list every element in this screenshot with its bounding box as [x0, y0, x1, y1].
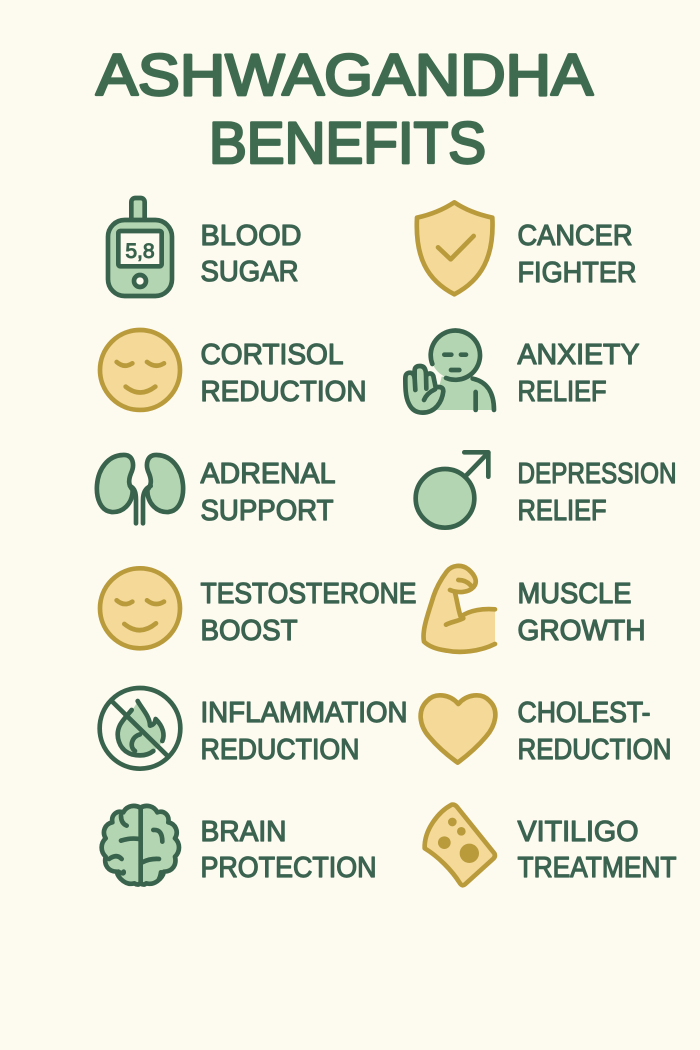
label: depression relief	[518, 458, 676, 527]
icon: glucose meter: 5,8	[125, 239, 155, 263]
title: ASHWAGANDHA	[96, 43, 593, 108]
label: inflammation reduction: INFLAMMATION	[200, 697, 408, 729]
label: cholesterol reduction	[518, 697, 672, 766]
icon: skin patch with spots	[425, 805, 495, 885]
label: cholesterol reduction: CHOLEST-	[518, 697, 650, 729]
label: cholesterol reduction: REDUCTION	[518, 734, 672, 766]
title: BENEFITS	[209, 111, 486, 176]
label: blood sugar	[200, 220, 302, 288]
label: brain protection: PROTECTION	[200, 852, 376, 884]
label: vitiligo treatment	[518, 816, 677, 884]
label: cancer fighter	[518, 220, 636, 289]
label: cortisol reduction: REDUCTION	[200, 376, 366, 408]
label: vitiligo treatment: TREATMENT	[518, 852, 677, 884]
label: vitiligo treatment: VITILIGO	[518, 816, 638, 848]
icon: shield with check	[417, 202, 493, 294]
label: brain protection	[200, 816, 376, 884]
label: muscle growth	[518, 578, 646, 647]
label: blood sugar: SUGAR	[200, 256, 298, 288]
label: inflammation reduction	[200, 697, 408, 766]
label: cancer fighter: CANCER	[518, 220, 632, 252]
label: adrenal support: SUPPORT	[200, 495, 334, 527]
icon: calm face 2	[100, 568, 180, 648]
icon: flexed arm	[424, 566, 495, 652]
label: muscle growth: GROWTH	[518, 615, 646, 647]
label: muscle growth: MUSCLE	[518, 578, 632, 610]
label: anxiety relief: ANXIETY	[518, 339, 640, 371]
label: anxiety relief	[518, 339, 640, 408]
label: adrenal support: ADRENAL	[200, 458, 336, 490]
icon: glucose meter	[108, 198, 172, 296]
icon: person with raised hand	[405, 330, 494, 413]
label: testosterone boost	[200, 578, 416, 647]
icon: calm face	[100, 330, 180, 410]
label: testosterone boost: BOOST	[200, 615, 298, 647]
label: testosterone boost: TESTOSTERONE	[200, 578, 416, 610]
label: cancer fighter: FIGHTER	[518, 257, 636, 289]
label: blood sugar: BLOOD	[200, 220, 302, 252]
icon: kidneys	[97, 455, 183, 523]
icon: brain	[102, 806, 179, 884]
icon: heart	[421, 695, 495, 763]
icon: male symbol	[416, 452, 488, 528]
label: inflammation reduction: REDUCTION	[200, 734, 360, 766]
label: brain protection: BRAIN	[200, 816, 286, 848]
label: depression relief: RELIEF	[518, 495, 606, 527]
label: adrenal support	[200, 458, 336, 527]
label: anxiety relief: RELIEF	[518, 376, 606, 408]
label: cortisol reduction: CORTISOL	[200, 339, 344, 371]
title	[96, 43, 593, 176]
icon: no inflammation flame	[100, 688, 180, 769]
label: cortisol reduction	[200, 339, 366, 408]
